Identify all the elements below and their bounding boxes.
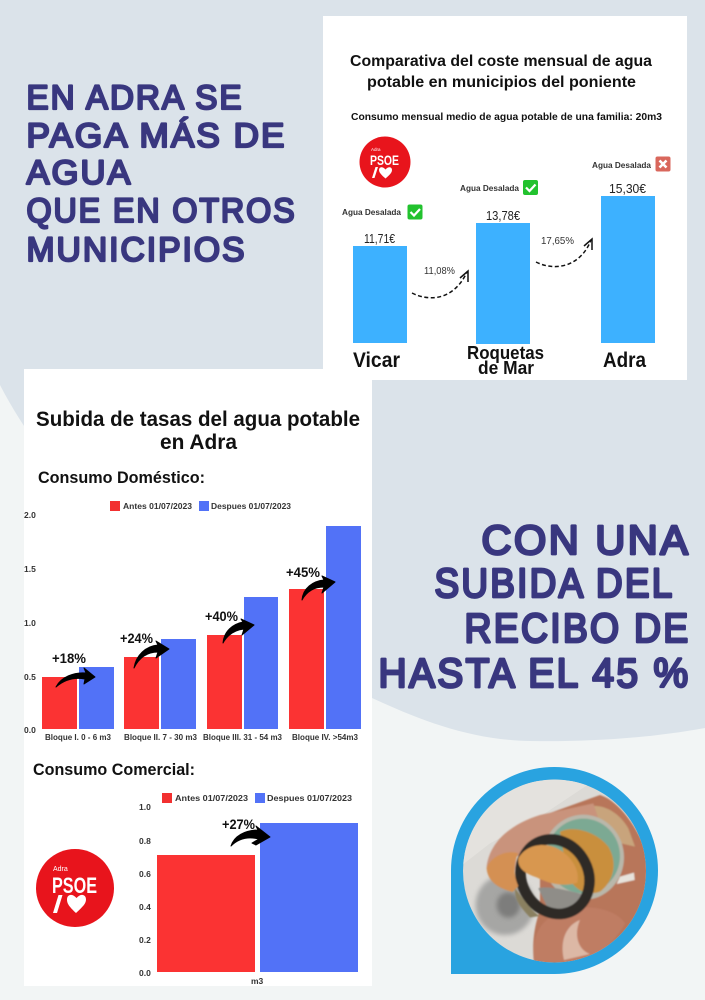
legend: doméstico: Despues 01/07/2023 (211, 501, 291, 511)
comparison title: potable en municipios del poniente (367, 74, 636, 91)
logo: PSOE Adra bottom (36, 849, 114, 927)
comparison title (350, 53, 652, 91)
comparison subtitle: Consumo mensual medio de agua potable de una familia: 20m3 (351, 111, 662, 123)
label: agua desalada Adra (592, 156, 670, 172)
panel: subida de tasas (24, 369, 372, 986)
callout: +24% (120, 630, 169, 668)
comparison title: Comparativa del coste mensual de agua (350, 53, 652, 70)
bar chart: consumo doméstico: 1.0 (24, 618, 36, 628)
callout: +27%: +27% (222, 816, 255, 832)
callout: +18% (52, 650, 95, 687)
panel title: en Adra (160, 431, 237, 454)
legend: comercial (162, 793, 352, 803)
bar chart: consumo doméstico: Bloque I. 0 - 6 m3 (45, 732, 111, 742)
label: agua desalada Roquetas: Agua Desalada (460, 184, 520, 193)
arrow: 11,08% (412, 265, 468, 298)
legend: doméstico: Antes 01/07/2023 (123, 501, 192, 511)
bar chart: consumo doméstico: Bloque IV. >54m3 (292, 732, 358, 742)
bar chart: consumo doméstico: 2.0 (24, 510, 36, 520)
heading: en Adra se paga más: MUNICIPIOS (26, 231, 246, 269)
callout: +45%: +45% (286, 564, 321, 580)
legend: doméstico (110, 501, 291, 511)
bar chart: consumo doméstico: 0.5 (24, 672, 36, 682)
arrow: 11,08%: 11,08% (424, 265, 455, 277)
heading: con una subida del recibo: SUBIDA DEL (434, 560, 674, 606)
bar chart: coste por municipio: 11,71€ (364, 232, 395, 246)
photo: grifo con sedimentos en marco azul (451, 767, 658, 974)
bar chart: coste por municipio: de Mar (478, 358, 534, 378)
bar chart: coste por municipio: 13,78€ (486, 209, 520, 223)
panel title (36, 408, 360, 454)
bar chart: consumo doméstico: Bloque II. 7 - 30 m3 (124, 732, 197, 742)
heading: con una subida del recibo (378, 517, 690, 696)
callout: +45% (286, 564, 335, 600)
bar chart: consumo doméstico: 0.0 (24, 725, 36, 735)
heading: con una subida del recibo: CON UNA (482, 517, 690, 563)
callout: +24%: +24% (120, 630, 153, 646)
label: agua desalada Vicar (342, 204, 422, 220)
panel title: Subida de tasas del agua potable (36, 408, 360, 431)
heading: con una subida del recibo: HASTA EL 45 % (378, 650, 690, 696)
bar chart: consumo comercial: 0.8 (139, 836, 151, 846)
logo: PSOE Adra top: PSOE (370, 153, 399, 168)
arrow: 17,65% (536, 235, 592, 267)
bar chart: consumo comercial (139, 802, 358, 986)
bar chart: consumo comercial: 0.6 (139, 869, 151, 879)
heading: en Adra se paga más: EN ADRA SE (26, 79, 244, 117)
label: agua desalada Roquetas (460, 180, 538, 195)
heading: consumo comercial: Consumo Comercial: (33, 760, 195, 779)
heading: en Adra se paga más: QUE EN OTROS (26, 192, 296, 230)
callout: +18%: +18% (52, 650, 87, 666)
heading: en Adra se paga más: AGUA (26, 154, 132, 192)
bar chart: consumo comercial: 0.0 (139, 968, 151, 978)
bar chart: coste por municipio: Vicar (353, 349, 400, 372)
bar chart: consumo doméstico (24, 510, 361, 742)
logo: PSOE Adra top: Adra (371, 147, 381, 152)
bar chart: consumo comercial: 1.0 (139, 802, 151, 812)
legend: comercial: Despues 01/07/2023 (267, 793, 352, 803)
bar chart: consumo comercial: 0.4 (139, 902, 151, 912)
heading: en Adra se paga más (26, 79, 296, 269)
logo: PSOE Adra bottom: PSOE (52, 873, 97, 898)
arrow: 17,65%: 17,65% (541, 235, 574, 247)
bar chart: consumo doméstico: 1.5 (24, 564, 36, 574)
bar chart: coste por municipio: Roquetas (467, 343, 544, 363)
bar chart: consumo comercial: m3 (251, 976, 264, 986)
callout: +40%: +40% (205, 608, 238, 624)
legend: comercial: Antes 01/07/2023 (175, 793, 248, 803)
callout: +27% (222, 816, 270, 846)
heading: en Adra se paga más: PAGA MÁS DE (26, 117, 286, 155)
callout: +40% (205, 608, 254, 643)
heading: consumo doméstico: Consumo Doméstico: (38, 468, 205, 487)
bar chart: consumo doméstico: Bloque III. 31 - 54 m3 (203, 732, 282, 742)
label: agua desalada Vicar: Agua Desalada (342, 208, 402, 217)
bar chart: coste por municipio: 15,30€ (609, 182, 646, 196)
panel: comparativa coste mensual (323, 16, 687, 380)
bar chart: coste por municipio (353, 182, 655, 378)
bar chart: consumo comercial: 0.2 (139, 935, 151, 945)
logo: PSOE Adra bottom: Adra (53, 866, 68, 873)
label: agua desalada Adra: Agua Desalada (592, 161, 652, 170)
bar chart: coste por municipio: Adra (603, 349, 646, 372)
logo: PSOE Adra top (360, 136, 410, 188)
